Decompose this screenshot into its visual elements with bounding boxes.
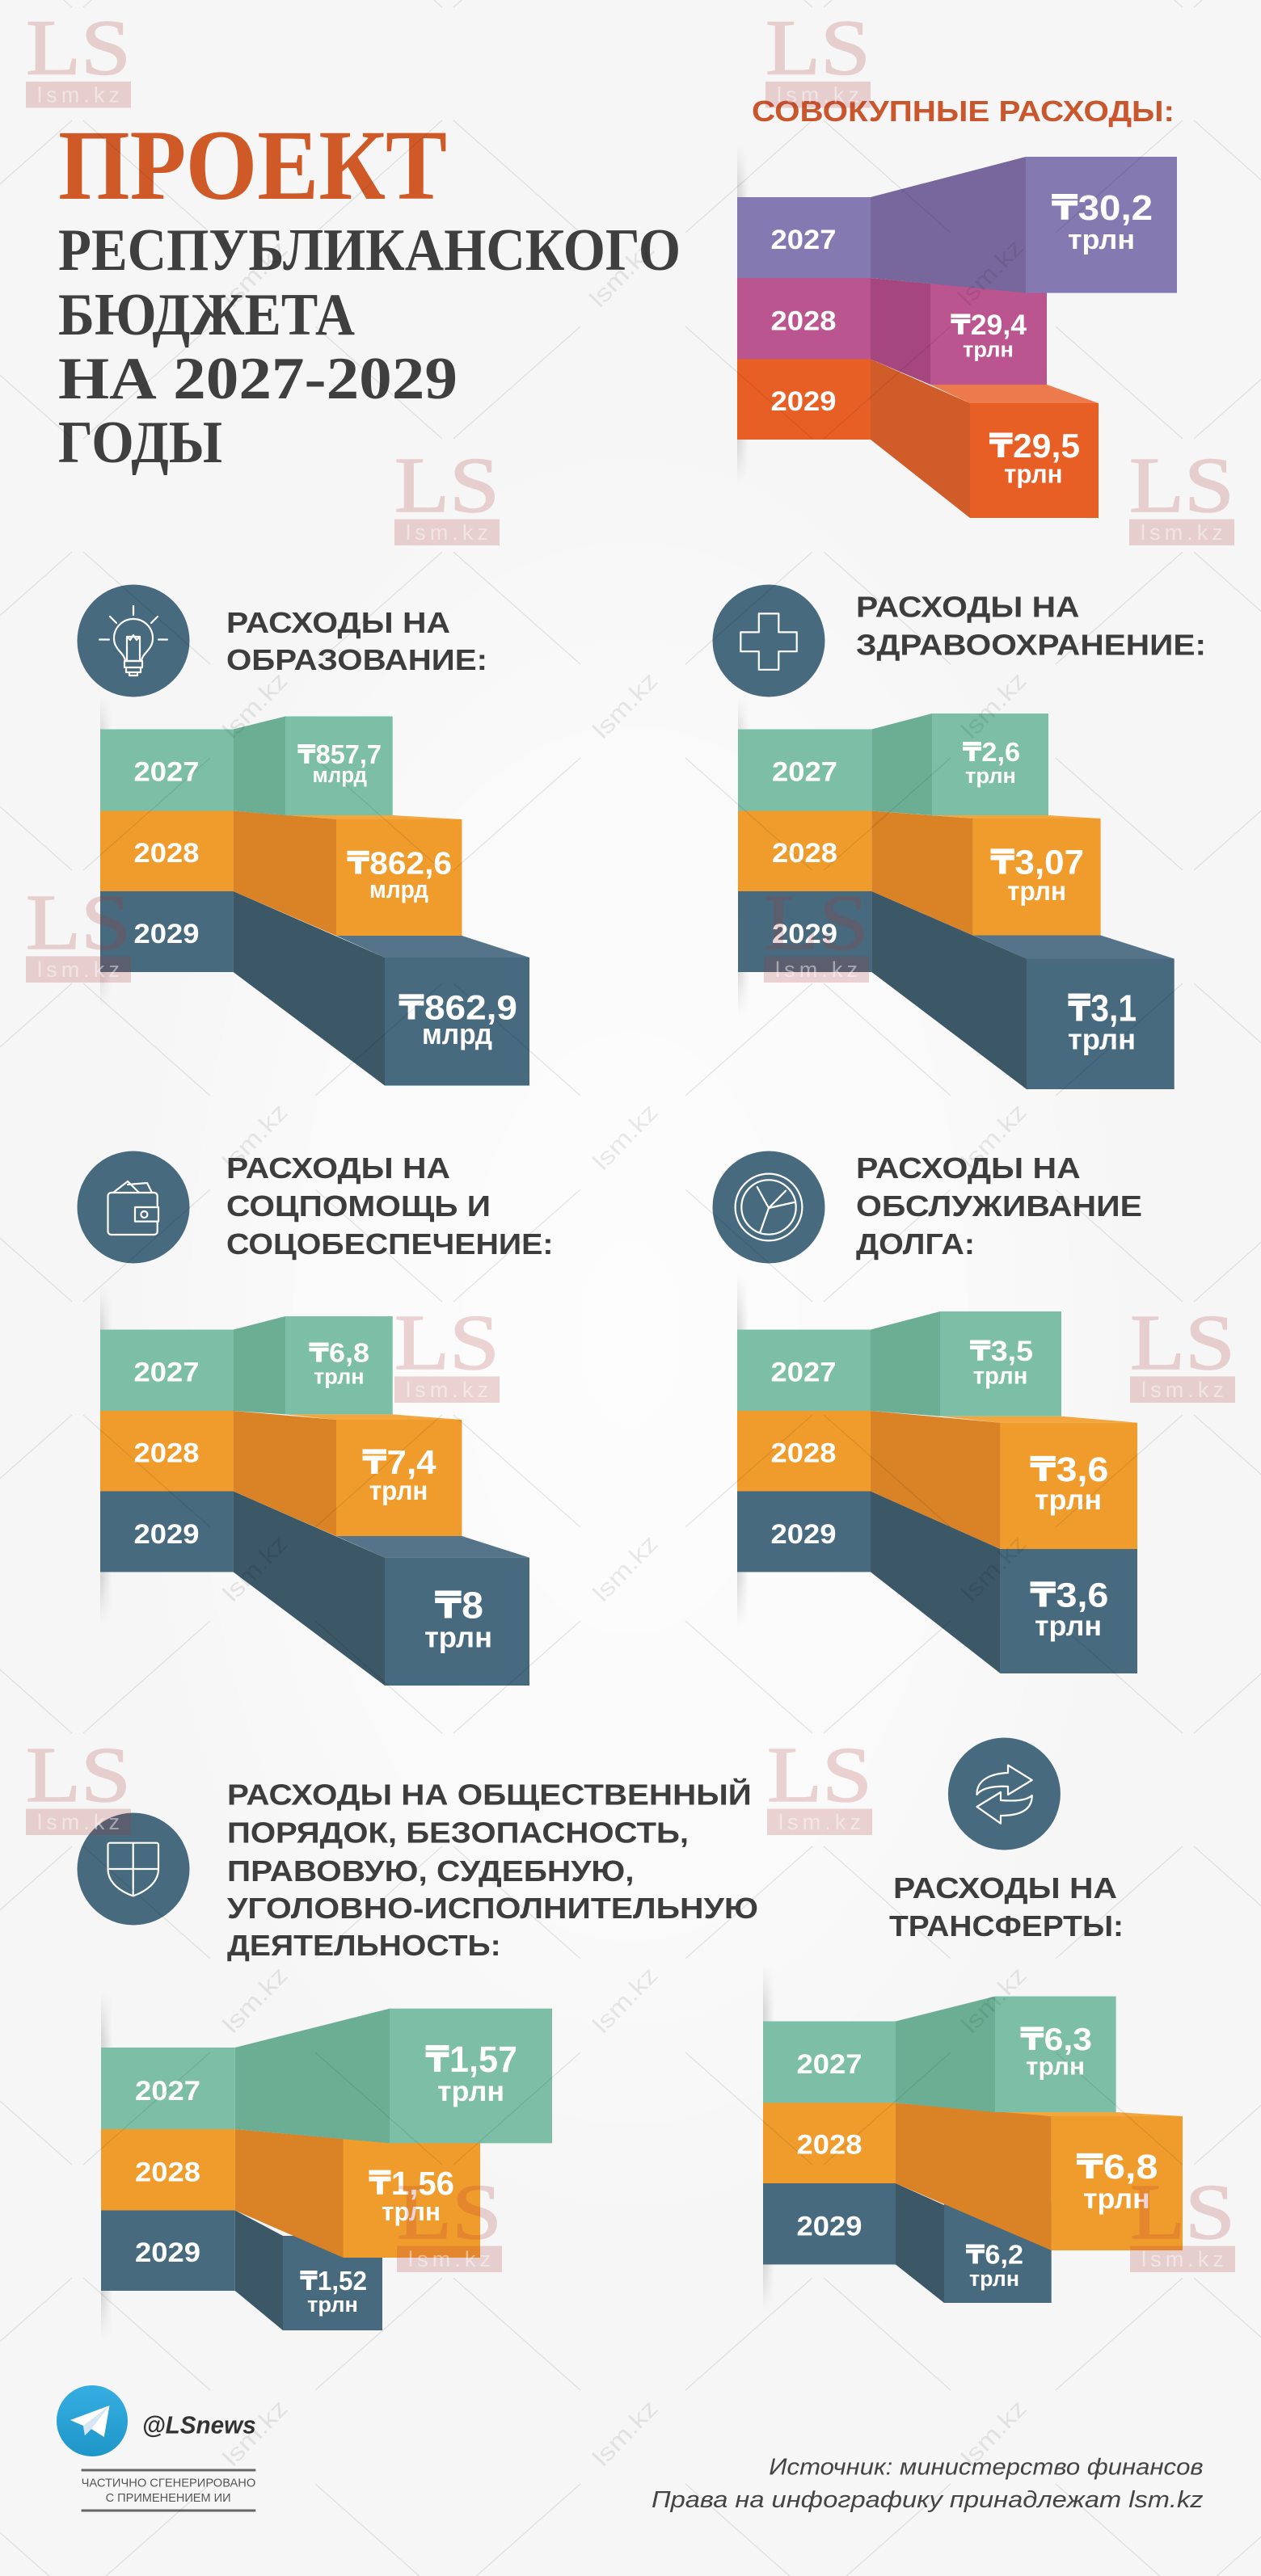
chart: healthcare: трлн (1007, 876, 1066, 906)
watermark: LS logo 11: lsm.kz (408, 2247, 491, 2271)
watermark: LS logo 4: LS (1129, 442, 1234, 529)
chart: transfers (763, 1964, 1183, 2311)
chart: education: млрд (369, 875, 428, 903)
watermark: diagonal lsm.kz: lsm.kz (956, 1099, 1032, 1176)
chart: education: млрд (312, 763, 367, 787)
source note (652, 2454, 1204, 2513)
chart: public order: трлн (437, 2076, 504, 2107)
heading: education: РАСХОДЫ НА (226, 606, 450, 639)
title line: БЮДЖЕТА: БЮДЖЕТА (58, 282, 355, 348)
title line: НА 2027-2029: НА 2027-2029 (58, 346, 458, 412)
watermark: diagonal lsm.kz: lsm.kz (588, 1962, 664, 2039)
panel: healthcare (713, 585, 1206, 1089)
chart: social assistance: трлн (314, 1364, 365, 1388)
chart: social assistance: ₸6,8 (309, 1338, 369, 1368)
chart: healthcare: трлн (1068, 1022, 1136, 1055)
chart: transfers: 2028 (797, 2130, 862, 2161)
icon: shield (78, 1813, 189, 1925)
watermark: LS logo 1: lsm.kz (37, 82, 120, 107)
chart: public order: трлн (307, 2292, 358, 2317)
watermark: LS logo 9: lsm.kz (37, 1810, 120, 1834)
chart: transfers: ₸6,8 (1076, 2148, 1158, 2187)
chart: total expenses: ₸29,5 (989, 427, 1080, 465)
heading: healthcare (856, 591, 1206, 662)
watermark: diagonal lsm.kz: lsm.kz (588, 667, 664, 744)
chart: total expenses: ₸30,2 (1052, 188, 1153, 228)
chart: social assistance (100, 1285, 529, 1686)
chart: total expenses (737, 145, 1177, 518)
chart: social assistance: 2028 (134, 1437, 199, 1468)
icon: medical cross (713, 585, 824, 697)
chart: total expenses: 2029 (771, 386, 836, 417)
watermark: diagonal lsm.kz: lsm.kz (584, 236, 660, 313)
watermark: LS logo 5: lsm.kz (37, 958, 120, 982)
chart: education (100, 697, 529, 1086)
heading: social assistance: СОЦОБЕСПЕЧЕНИЕ: (226, 1227, 553, 1261)
heading: debt service (856, 1151, 1142, 1261)
chart: healthcare (738, 697, 1175, 1089)
chart: public order: ₸1,57 (425, 2039, 517, 2080)
heading: social assistance: СОЦПОМОЩЬ И (226, 1189, 491, 1223)
chart: healthcare: 2027 (772, 757, 837, 788)
telegram block (57, 2385, 256, 2511)
watermark: diagonal lsm.kz: lsm.kz (217, 1530, 293, 1607)
watermark: LS logo 6: lsm.kz (775, 958, 858, 982)
panel: transfers (763, 1737, 1183, 2311)
heading: transfers: ТРАНСФЕРТЫ: (889, 1909, 1124, 1943)
chart: healthcare: ₸3,1 (1068, 987, 1137, 1029)
chart: debt service: трлн (1035, 1610, 1102, 1642)
chart: education: ₸862,9 (399, 989, 517, 1028)
chart: debt service: 2027 (771, 1357, 836, 1387)
chart: debt service: трлн (1035, 1484, 1102, 1516)
chart: total expenses: трлн (1068, 225, 1135, 255)
watermark: diagonal lsm.kz: lsm.kz (217, 667, 293, 744)
watermark: LS logo 9: LS (26, 1732, 131, 1819)
chart: social assistance: 2029 (134, 1519, 199, 1550)
chart: debt service: ₸3,6 (1030, 1576, 1108, 1614)
heading: public order: ПРАВОВУЮ, СУДЕБНУЮ, (227, 1854, 634, 1888)
icon: exchange arrows (948, 1737, 1061, 1850)
heading: healthcare: ЗДРАВООХРАНЕНИЕ: (856, 629, 1206, 662)
watermark: LS logo 3: lsm.kz (406, 520, 488, 545)
heading: public order: ДЕЯТЕЛЬНОСТЬ: (227, 1929, 501, 1962)
chart: social assistance: трлн (424, 1620, 492, 1653)
watermark: diagonal lsm.kz: lsm.kz (956, 1530, 1032, 1607)
title line: ГОДЫ: ГОДЫ (58, 410, 222, 476)
chart: public order (101, 1992, 552, 2339)
watermark: diagonal lsm.kz: lsm.kz (956, 2395, 1032, 2472)
watermark: LS logo 8: lsm.kz (1141, 1378, 1224, 1402)
chart: social assistance: ₸8 (435, 1585, 483, 1627)
watermark: LS logo 5: LS (26, 879, 131, 966)
watermark: LS logo 1: LS (26, 5, 131, 92)
chart: transfers: ₸6,3 (1020, 2022, 1092, 2057)
chart: public order: 2028 (135, 2157, 200, 2188)
chart: education: ₸857,7 (297, 739, 382, 769)
chart: education: 2028 (134, 838, 199, 869)
heading: education: ОБРАЗОВАНИЕ: (226, 643, 487, 676)
watermark: LS logo 2: lsm.kz (777, 82, 859, 107)
watermark: diagonal lsm.kz: lsm.kz (588, 2395, 664, 2472)
panel: public order (78, 1778, 758, 2339)
chart: transfers: трлн (1026, 2052, 1085, 2081)
chart: healthcare: ₸3,07 (990, 844, 1084, 882)
chart: transfers: трлн (969, 2267, 1019, 2291)
watermark: diagonal lsm.kz: lsm.kz (588, 1099, 664, 1176)
chart: debt service: трлн (973, 1362, 1027, 1390)
icon: wallet (78, 1151, 189, 1264)
heading: public order: ПОРЯДОК, БЕЗОПАСНОСТЬ, (227, 1816, 689, 1850)
chart: social assistance: 2027 (134, 1357, 199, 1387)
heading: debt service: РАСХОДЫ НА (856, 1151, 1081, 1185)
chart: total expenses: 2027 (771, 225, 836, 255)
title line: ПРОЕКТ: ПРОЕКТ (58, 110, 447, 221)
chart: total expenses: 2028 (771, 305, 836, 336)
watermark: LS logo 11: LS (397, 2169, 502, 2256)
heading: debt service: ДОЛГА: (856, 1227, 975, 1261)
heading: total expenses: СОВОКУПНЫЕ РАСХОДЫ: (752, 95, 1175, 128)
icon: telegram (57, 2385, 128, 2456)
watermark: diagonal lsm.kz: lsm.kz (217, 1099, 293, 1176)
watermark: diagonal lsm.kz: lsm.kz (956, 1962, 1032, 2039)
chart: healthcare: трлн (965, 764, 1016, 788)
chart: total expenses: ₸29,4 (951, 309, 1027, 341)
heading: debt service: ОБСЛУЖИВАНИЕ (856, 1189, 1142, 1223)
chart: debt service: 2028 (771, 1437, 836, 1468)
chart: education: ₸862,6 (347, 847, 452, 882)
watermark: diagonal lsm.kz: lsm.kz (588, 1530, 664, 1607)
chart: education: 2027 (134, 757, 199, 788)
panel: education (78, 585, 529, 1086)
heading: social assistance (226, 1151, 553, 1261)
watermark: LS logo 7: lsm.kz (406, 1378, 488, 1402)
watermark: LS logo 3: LS (394, 442, 500, 529)
chart: debt service: 2029 (771, 1519, 836, 1550)
chart: public order: 2027 (135, 2076, 200, 2107)
heading: public order (227, 1778, 758, 1962)
chart: transfers: 2027 (797, 2049, 862, 2080)
heading: transfers (889, 1871, 1124, 1943)
chart: debt service: ₸3,6 (1030, 1450, 1108, 1489)
title (58, 110, 681, 476)
chart: public order: ₸1,52 (300, 2266, 367, 2296)
watermark: LS logo 8: LS (1130, 1299, 1235, 1387)
chart: public order: 2029 (135, 2237, 200, 2268)
handle: @LSnews (142, 2411, 256, 2439)
icon: pie chart (713, 1151, 824, 1264)
heading: transfers: РАСХОДЫ НА (893, 1871, 1117, 1905)
chart: education: 2029 (134, 919, 199, 949)
chart: education: млрд (422, 1017, 492, 1050)
watermark: diagonal lsm.kz: lsm.kz (953, 234, 1029, 311)
chart: healthcare: 2028 (772, 838, 837, 869)
panel: social assistance (78, 1151, 553, 1686)
watermark: diagonal lsm.kz: lsm.kz (217, 2395, 293, 2472)
heading: education (226, 606, 487, 676)
panel: debt service (713, 1151, 1142, 1673)
chart: transfers: трлн (1083, 2183, 1150, 2215)
watermark: diagonal lsm.kz (217, 234, 1032, 2472)
watermark: diagonal lsm.kz: lsm.kz (956, 667, 1032, 744)
chart: transfers: 2029 (797, 2212, 862, 2242)
chart: debt service: ₸3,5 (970, 1336, 1033, 1367)
chart: total expenses: трлн (963, 338, 1014, 362)
watermark: LS logo 2: LS (765, 5, 871, 92)
watermark: LS logo 6: LS (764, 879, 869, 966)
chart: debt service (737, 1273, 1137, 1673)
chart: social assistance: ₸7,4 (362, 1443, 436, 1481)
ai disclaimer: ЧАСТИЧНО СГЕНЕРИРОВАНО (82, 2477, 255, 2490)
watermark: LS logo 4: lsm.kz (1141, 520, 1223, 545)
chart: public order: трлн (382, 2197, 441, 2226)
ai disclaimer: С ПРИМЕНЕНИЕМ ИИ (106, 2491, 231, 2505)
source note: Права на инфографику принадлежат lsm.kz (652, 2487, 1204, 2513)
chart: total expenses: трлн (1004, 460, 1062, 489)
watermark: LS logo 10: lsm.kz (778, 1810, 861, 1834)
icon: light bulb (78, 585, 189, 697)
panel: total expenses (737, 95, 1177, 518)
chart: transfers: ₸6,2 (966, 2240, 1023, 2269)
heading: public order: УГОЛОВНО-ИСПОЛНИТЕЛЬНУЮ (227, 1892, 758, 1925)
chart: public order: ₸1,56 (369, 2165, 454, 2202)
watermark: diagonal lsm.kz: lsm.kz (217, 236, 293, 313)
chart: healthcare: ₸2,6 (963, 737, 1020, 767)
title line: РЕСПУБЛИКАНСКОГО: РЕСПУБЛИКАНСКОГО (58, 217, 681, 284)
watermark: LS logo 12: lsm.kz (1141, 2247, 1224, 2271)
watermark: LS logo 10: LS (767, 1732, 872, 1819)
heading: public order: РАСХОДЫ НА ОБЩЕСТВЕННЫЙ (227, 1778, 752, 1812)
chart: healthcare: 2029 (772, 919, 837, 949)
ai disclaimer (82, 2469, 255, 2511)
watermark: LS logo 12: LS (1130, 2169, 1235, 2256)
source note: Источник: министерство финансов (769, 2454, 1204, 2480)
watermark: LS logo 7: LS (394, 1299, 500, 1387)
heading: healthcare: РАСХОДЫ НА (856, 591, 1080, 624)
heading: social assistance: РАСХОДЫ НА (226, 1151, 450, 1185)
chart: social assistance: трлн (369, 1475, 428, 1505)
watermark: diagonal lsm.kz: lsm.kz (217, 1962, 293, 2039)
